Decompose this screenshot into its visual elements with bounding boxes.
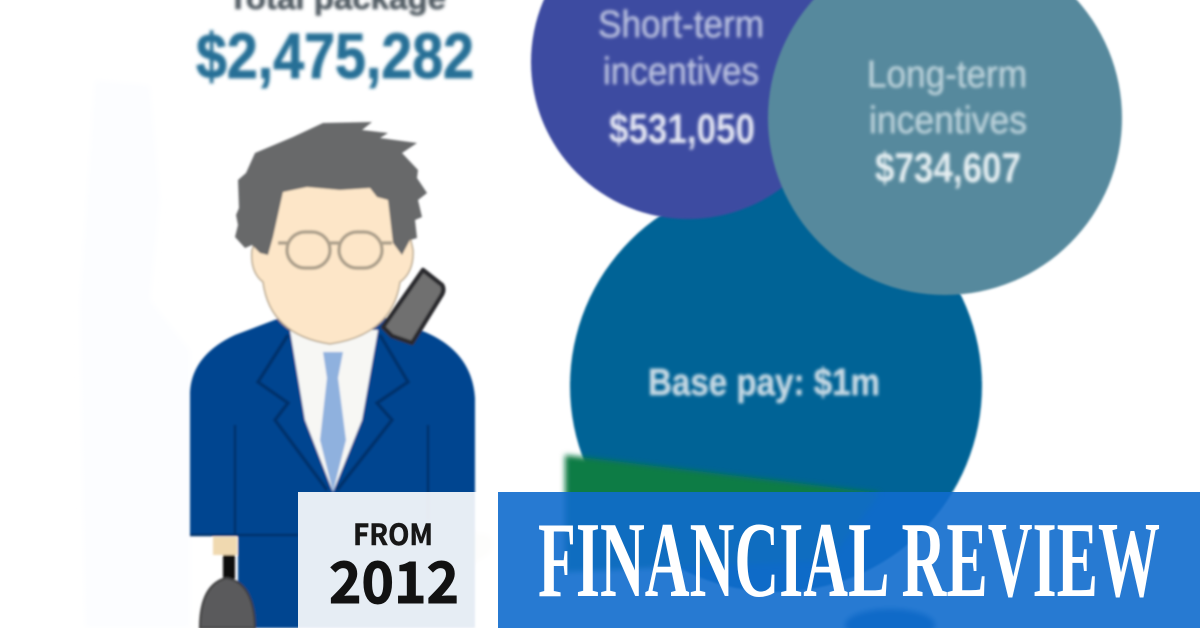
icon: phone [383,270,443,343]
badge text: FROM [353,512,433,554]
total value: $2,475,282 [196,20,474,92]
icon: glasses [278,232,392,268]
icon: face [252,178,413,344]
masthead banner [498,492,1200,628]
lapels [258,335,408,490]
figure: executive on phone [190,122,475,628]
badge: from 2012 [298,492,498,628]
icon: hand [213,537,237,555]
circle: short-term incentives: Short-term [598,4,764,46]
circle: base pay [570,180,982,592]
icon: hair [235,122,427,255]
icon: tie [320,352,346,492]
circle: short-term incentives: $531,050 [609,105,755,152]
faint shape under badge [425,532,493,571]
circle: short-term incentives: incentives [603,51,759,93]
jacket seams [190,425,428,535]
circle: short-term incentives [531,0,845,219]
circle: long-term incentives: $734,607 [875,144,1021,191]
green segment [565,455,880,572]
circle: base pay: Base pay: $1m [648,362,880,404]
icon: suit jacket [190,316,475,628]
circle: long-term incentives [768,0,1122,295]
icon: briefcase [200,578,255,628]
circle: long-term incentives: Long-term [867,54,1027,96]
faint background shape [80,80,190,628]
icon: bag handle [223,555,235,579]
circle: long-term incentives: incentives [869,100,1027,142]
badge text: 2012 [329,538,459,620]
dark patch under banner [845,609,935,628]
icon: shirt [290,330,378,492]
